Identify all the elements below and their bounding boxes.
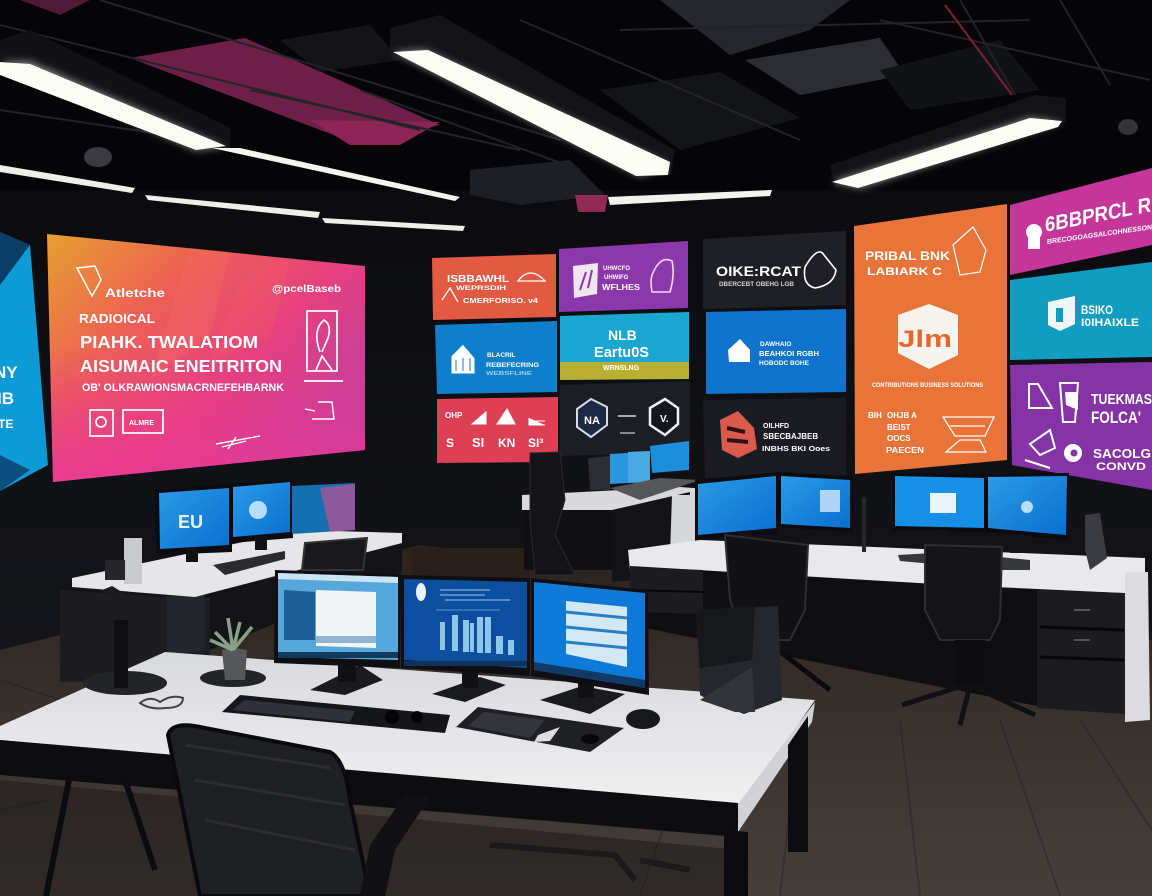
keyboard main xyxy=(222,695,450,733)
panel: teal and yellow tile: Eartu0S xyxy=(594,345,649,361)
panel: teal banner: BSIKO xyxy=(1081,303,1113,317)
monitor two xyxy=(401,575,530,702)
floor xyxy=(0,545,1152,896)
chair: middle right xyxy=(725,535,830,700)
panel: orange poster xyxy=(854,204,1007,474)
icon: security camera xyxy=(84,119,1138,167)
panel: orange poster: OHJB A xyxy=(887,411,917,420)
panel: dark title tile: DBERCEBT OBEHG LGB xyxy=(719,282,795,288)
panel: purple tile xyxy=(559,241,688,312)
right desk monitors xyxy=(695,472,1107,570)
panel: blue building tile: WEBSFLINE xyxy=(486,371,533,377)
button icons: ALMRE xyxy=(129,420,154,427)
centre back workstation xyxy=(522,441,720,582)
panel: orange poster: CONTRIBUTIONS BUSINESS SOLUTIONS xyxy=(872,382,984,389)
ceiling lights xyxy=(0,50,1062,231)
button icons xyxy=(90,410,163,436)
panel: orange poster: OOCS xyxy=(887,434,911,443)
panel: orange poster: BIH xyxy=(868,411,882,420)
headline: PIAHK. TWALATIOM xyxy=(80,332,258,352)
left pair of monitors xyxy=(155,479,355,575)
logo and brand: Atletche xyxy=(105,286,165,300)
panel: blue building tile: REBEFECRING xyxy=(486,362,539,369)
desk lamp xyxy=(83,586,167,695)
ceiling structure xyxy=(0,0,1152,212)
panel: red icon tile: SI³ xyxy=(528,436,543,450)
right workstation desk xyxy=(628,540,1150,722)
panel: blue bag tile: HOBODC BOHE xyxy=(759,361,809,367)
panel: purple banner: CONVD xyxy=(1096,461,1146,473)
monitor three xyxy=(531,578,649,714)
panel: teal and yellow tile: WRNSLNG xyxy=(603,365,640,372)
headline xyxy=(79,311,284,394)
squiggle marks xyxy=(216,402,334,449)
top right brand: @pcelBaseb xyxy=(272,283,341,295)
icon: glasses xyxy=(140,697,183,708)
logo and brand xyxy=(77,266,165,300)
panel: magenta banner: BRECOGOAGSALCOHNESSON xyxy=(1047,224,1152,246)
poster icon xyxy=(304,311,343,381)
panel: orange poster: PAECEN xyxy=(886,446,924,455)
panel: orange poster: LABIARK C xyxy=(867,266,942,278)
panel: orange poster: BEIST xyxy=(887,423,911,432)
pc tower / device on desk xyxy=(696,606,782,714)
panel: purple banner xyxy=(1010,362,1152,490)
panel: red orange tile: ISBBAWHL xyxy=(447,274,509,285)
left pair of monitors: EU xyxy=(178,512,203,532)
panel: red orange tile xyxy=(432,254,556,320)
panel: dark lion tile: INBHS BKI Ooes xyxy=(762,446,830,453)
panel: red orange tile: CMERFORISO. v4 xyxy=(463,296,539,305)
panel: purple tile: UHWCFO xyxy=(603,266,630,272)
desk items xyxy=(105,538,142,584)
back wall xyxy=(0,0,1152,660)
panel: teal banner: I0IHAIXLE xyxy=(1081,317,1139,329)
panel: far-left blue poster xyxy=(0,232,48,491)
panel: dark hexagon tile: V. xyxy=(660,414,669,425)
headline: OB' OLKRAWIONSMACRNEFEHBARNK xyxy=(82,382,284,394)
icon: mouse xyxy=(626,709,660,729)
panel: purple tile: WFLHES xyxy=(602,283,641,292)
panel: red icon tile: S xyxy=(446,436,454,450)
panel: dark title tile: OIKE:RCAT xyxy=(716,263,801,279)
panel: dark title tile xyxy=(703,231,846,309)
front desk xyxy=(0,652,815,896)
panel: dark lion tile: SBECBAJBEB xyxy=(763,432,818,441)
headline: AISUMAIC ENEITRITON xyxy=(80,356,282,376)
panel: large gradient wall screen xyxy=(47,234,365,482)
back chair xyxy=(302,538,367,570)
monitor one xyxy=(274,570,401,695)
panel: purple tile: UHWIFG xyxy=(604,275,629,281)
keyboard small with tablet xyxy=(456,707,624,752)
front monitors xyxy=(274,570,649,714)
chair: right desk xyxy=(902,545,1035,725)
panel: dark lion tile: OILHFD xyxy=(763,423,789,430)
panel: orange poster: Jlm xyxy=(898,326,952,353)
front chair xyxy=(168,725,690,896)
panel: red icon tile: OHP xyxy=(445,411,463,420)
panel: red orange tile: WEPRSDIH xyxy=(456,286,506,292)
panel: orange poster: PRIBAL BNK xyxy=(865,249,950,263)
panel: teal and yellow tile: NLB xyxy=(608,327,637,343)
headline: RADIOICAL xyxy=(79,311,155,326)
panel: dark hexagon tile xyxy=(560,381,690,456)
panel: red icon tile: KN xyxy=(498,436,515,450)
panel: red icon tile: SI xyxy=(472,435,484,450)
panel: red icon tile xyxy=(437,397,558,463)
panel: purple banner: SACOLG xyxy=(1093,446,1151,461)
panel: teal banner xyxy=(1010,262,1152,360)
panel: purple banner: FOLCA' xyxy=(1091,408,1141,427)
panel: magenta banner xyxy=(1010,168,1152,275)
panel: blue building tile xyxy=(435,321,557,394)
left back workstation xyxy=(60,479,402,682)
panel: dark hexagon tile: NA xyxy=(584,415,600,427)
panel: blue building tile: BLACRIL xyxy=(487,352,516,359)
panel: blue bag tile: DAWHAIO xyxy=(760,341,791,348)
panel: blue bag tile: BEAHKOI RGBH xyxy=(759,351,819,358)
icon: potted plant xyxy=(200,618,266,687)
panel: teal and yellow tile xyxy=(560,312,689,380)
panel: blue bag tile xyxy=(706,309,846,394)
panel: dark lion tile xyxy=(703,398,846,478)
